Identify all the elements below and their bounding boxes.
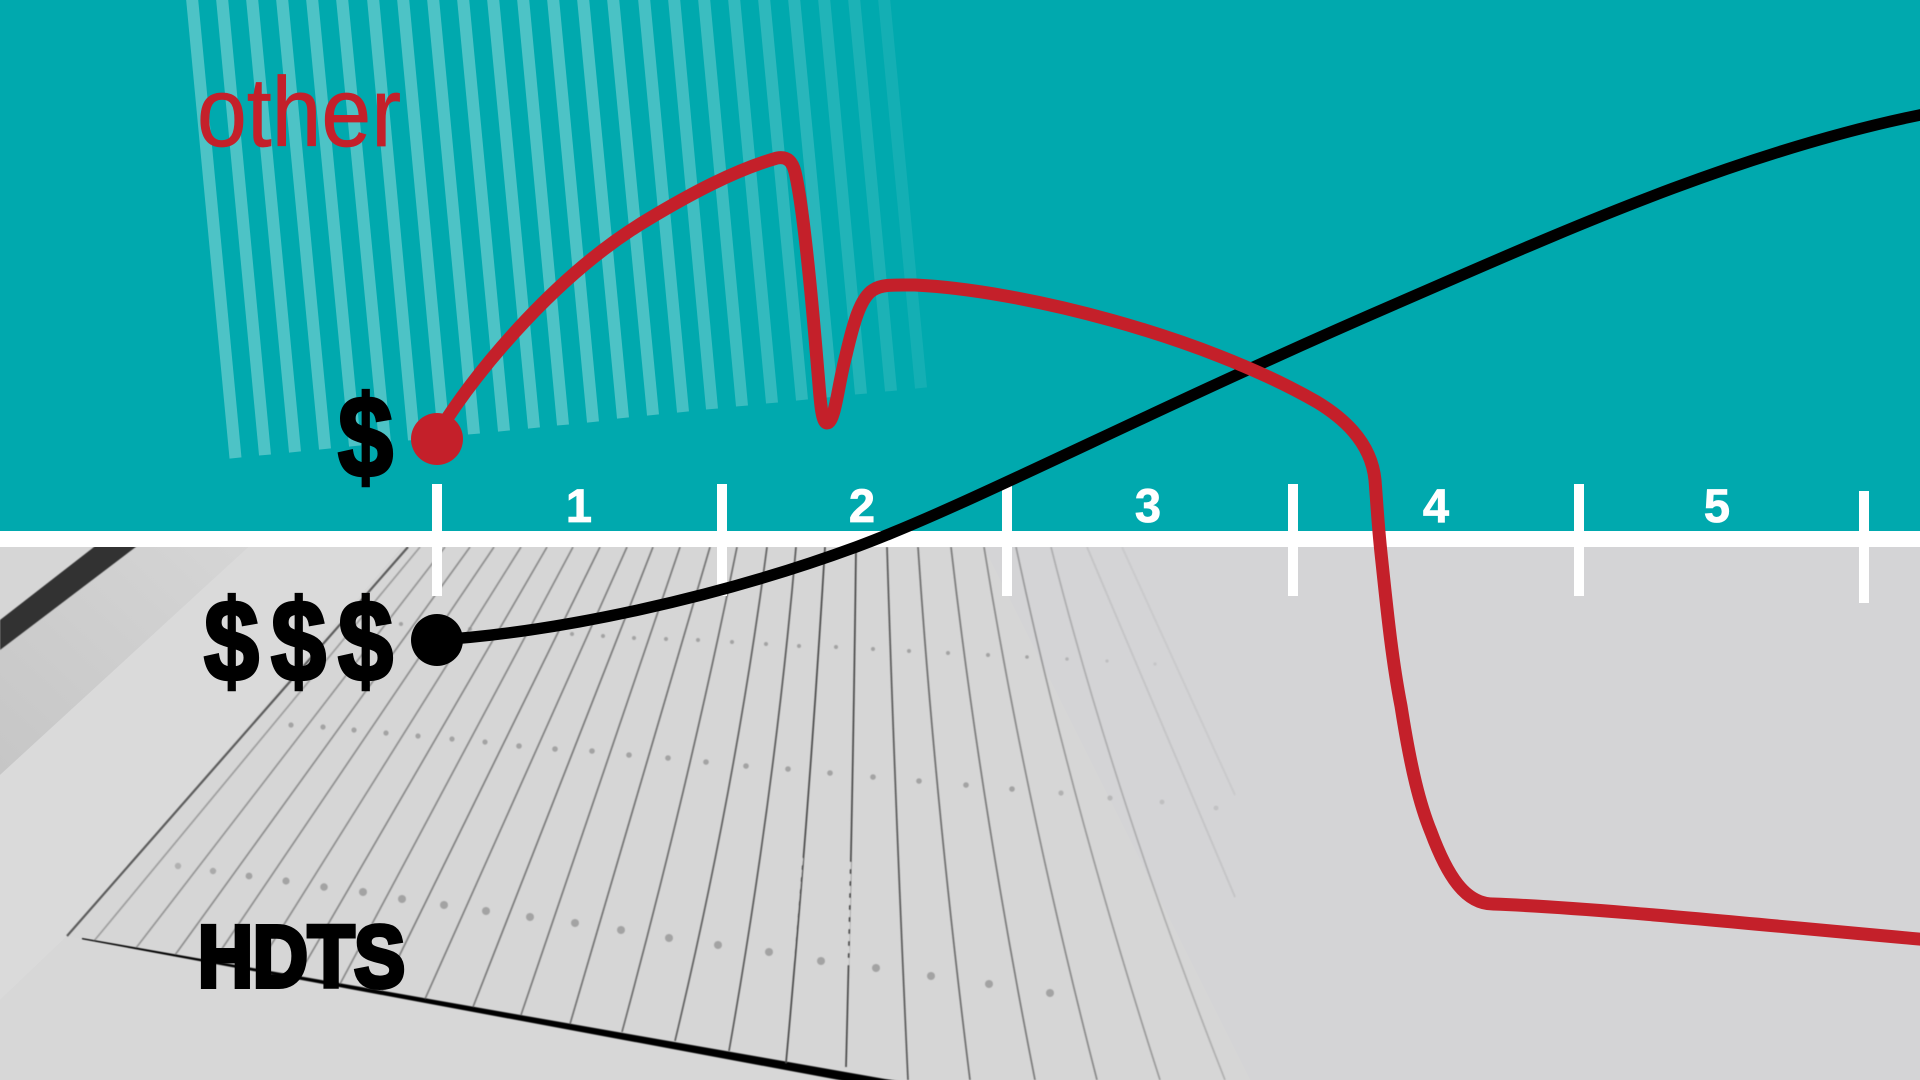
stripes: pale tilted bars [192, 0, 921, 458]
label: triple dollar: $ [338, 576, 393, 706]
label: HDTS: HDTS [198, 908, 405, 1006]
label: triple dollar [204, 576, 393, 706]
chart line: red other cost [411, 158, 1920, 940]
axis numbers 1 to 5: 3 [1135, 479, 1161, 532]
axis numbers 1 to 5: 5 [1704, 479, 1730, 532]
axis: white band [0, 531, 1920, 547]
axis numbers 1 to 5 [566, 479, 1730, 532]
label: triple dollar: $ [204, 576, 259, 706]
axis numbers 1 to 5: 4 [1423, 479, 1449, 532]
label: triple dollar: $ [271, 576, 326, 706]
label: other: other [197, 57, 401, 167]
chart line: black HDTS cost [411, 113, 1920, 666]
axis numbers 1 to 5: 2 [849, 479, 875, 532]
panel: grey photo of HDTS tape [0, 540, 1920, 1080]
axis ticks [432, 484, 1869, 603]
panel: teal upper background [0, 0, 1920, 535]
label: single dollar: $ [338, 372, 393, 502]
axis numbers 1 to 5: 1 [566, 479, 592, 532]
